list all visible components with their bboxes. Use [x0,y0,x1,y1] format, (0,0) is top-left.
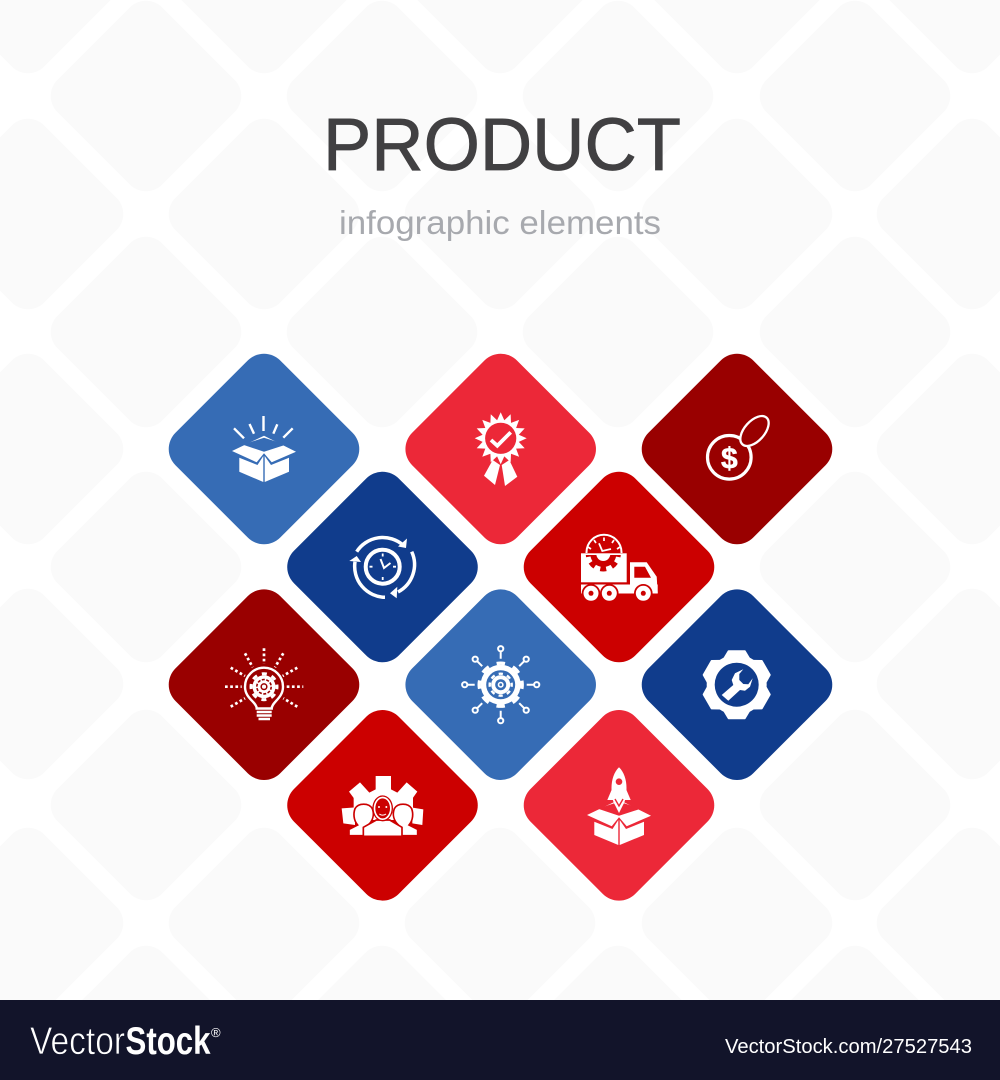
panel: network gear [396,580,605,789]
icon: open box with rays [232,416,296,482]
icon: truck with gear and gauge [581,535,658,603]
icon: team in front of gear [342,776,423,836]
panel: idea bulb [159,580,369,789]
icon: gear with connected nodes [462,646,539,723]
icon: award badge with check [475,412,527,486]
footer logo: Stock [126,1020,211,1063]
panel: maintenance gear [632,580,842,789]
panel: team [278,701,487,910]
title: PRODUCT [323,103,681,186]
footer bar [0,1000,1000,1080]
icon: rocket from box [587,767,651,845]
footer image id: VectorStock.com/27527543 [725,1036,972,1058]
footer logo: ® [211,1025,221,1040]
footer logo [30,1020,221,1063]
panel: rocket launch [514,701,724,910]
icon: dollar price tag: $ [721,442,738,476]
icon: gear with wrench [701,651,772,718]
panel: open box [159,344,369,554]
panel: price tag [632,344,842,554]
panel: award [396,344,605,554]
panel: time cycle [278,462,487,672]
panel: delivery truck [524,472,714,662]
icon: light bulb with gear and dotted rays [225,648,303,719]
subtitle: infographic elements [339,204,661,241]
footer logo: Vector [30,1020,125,1063]
icon: dollar price tag [708,411,774,479]
icon: clock with circular arrows [349,537,415,598]
